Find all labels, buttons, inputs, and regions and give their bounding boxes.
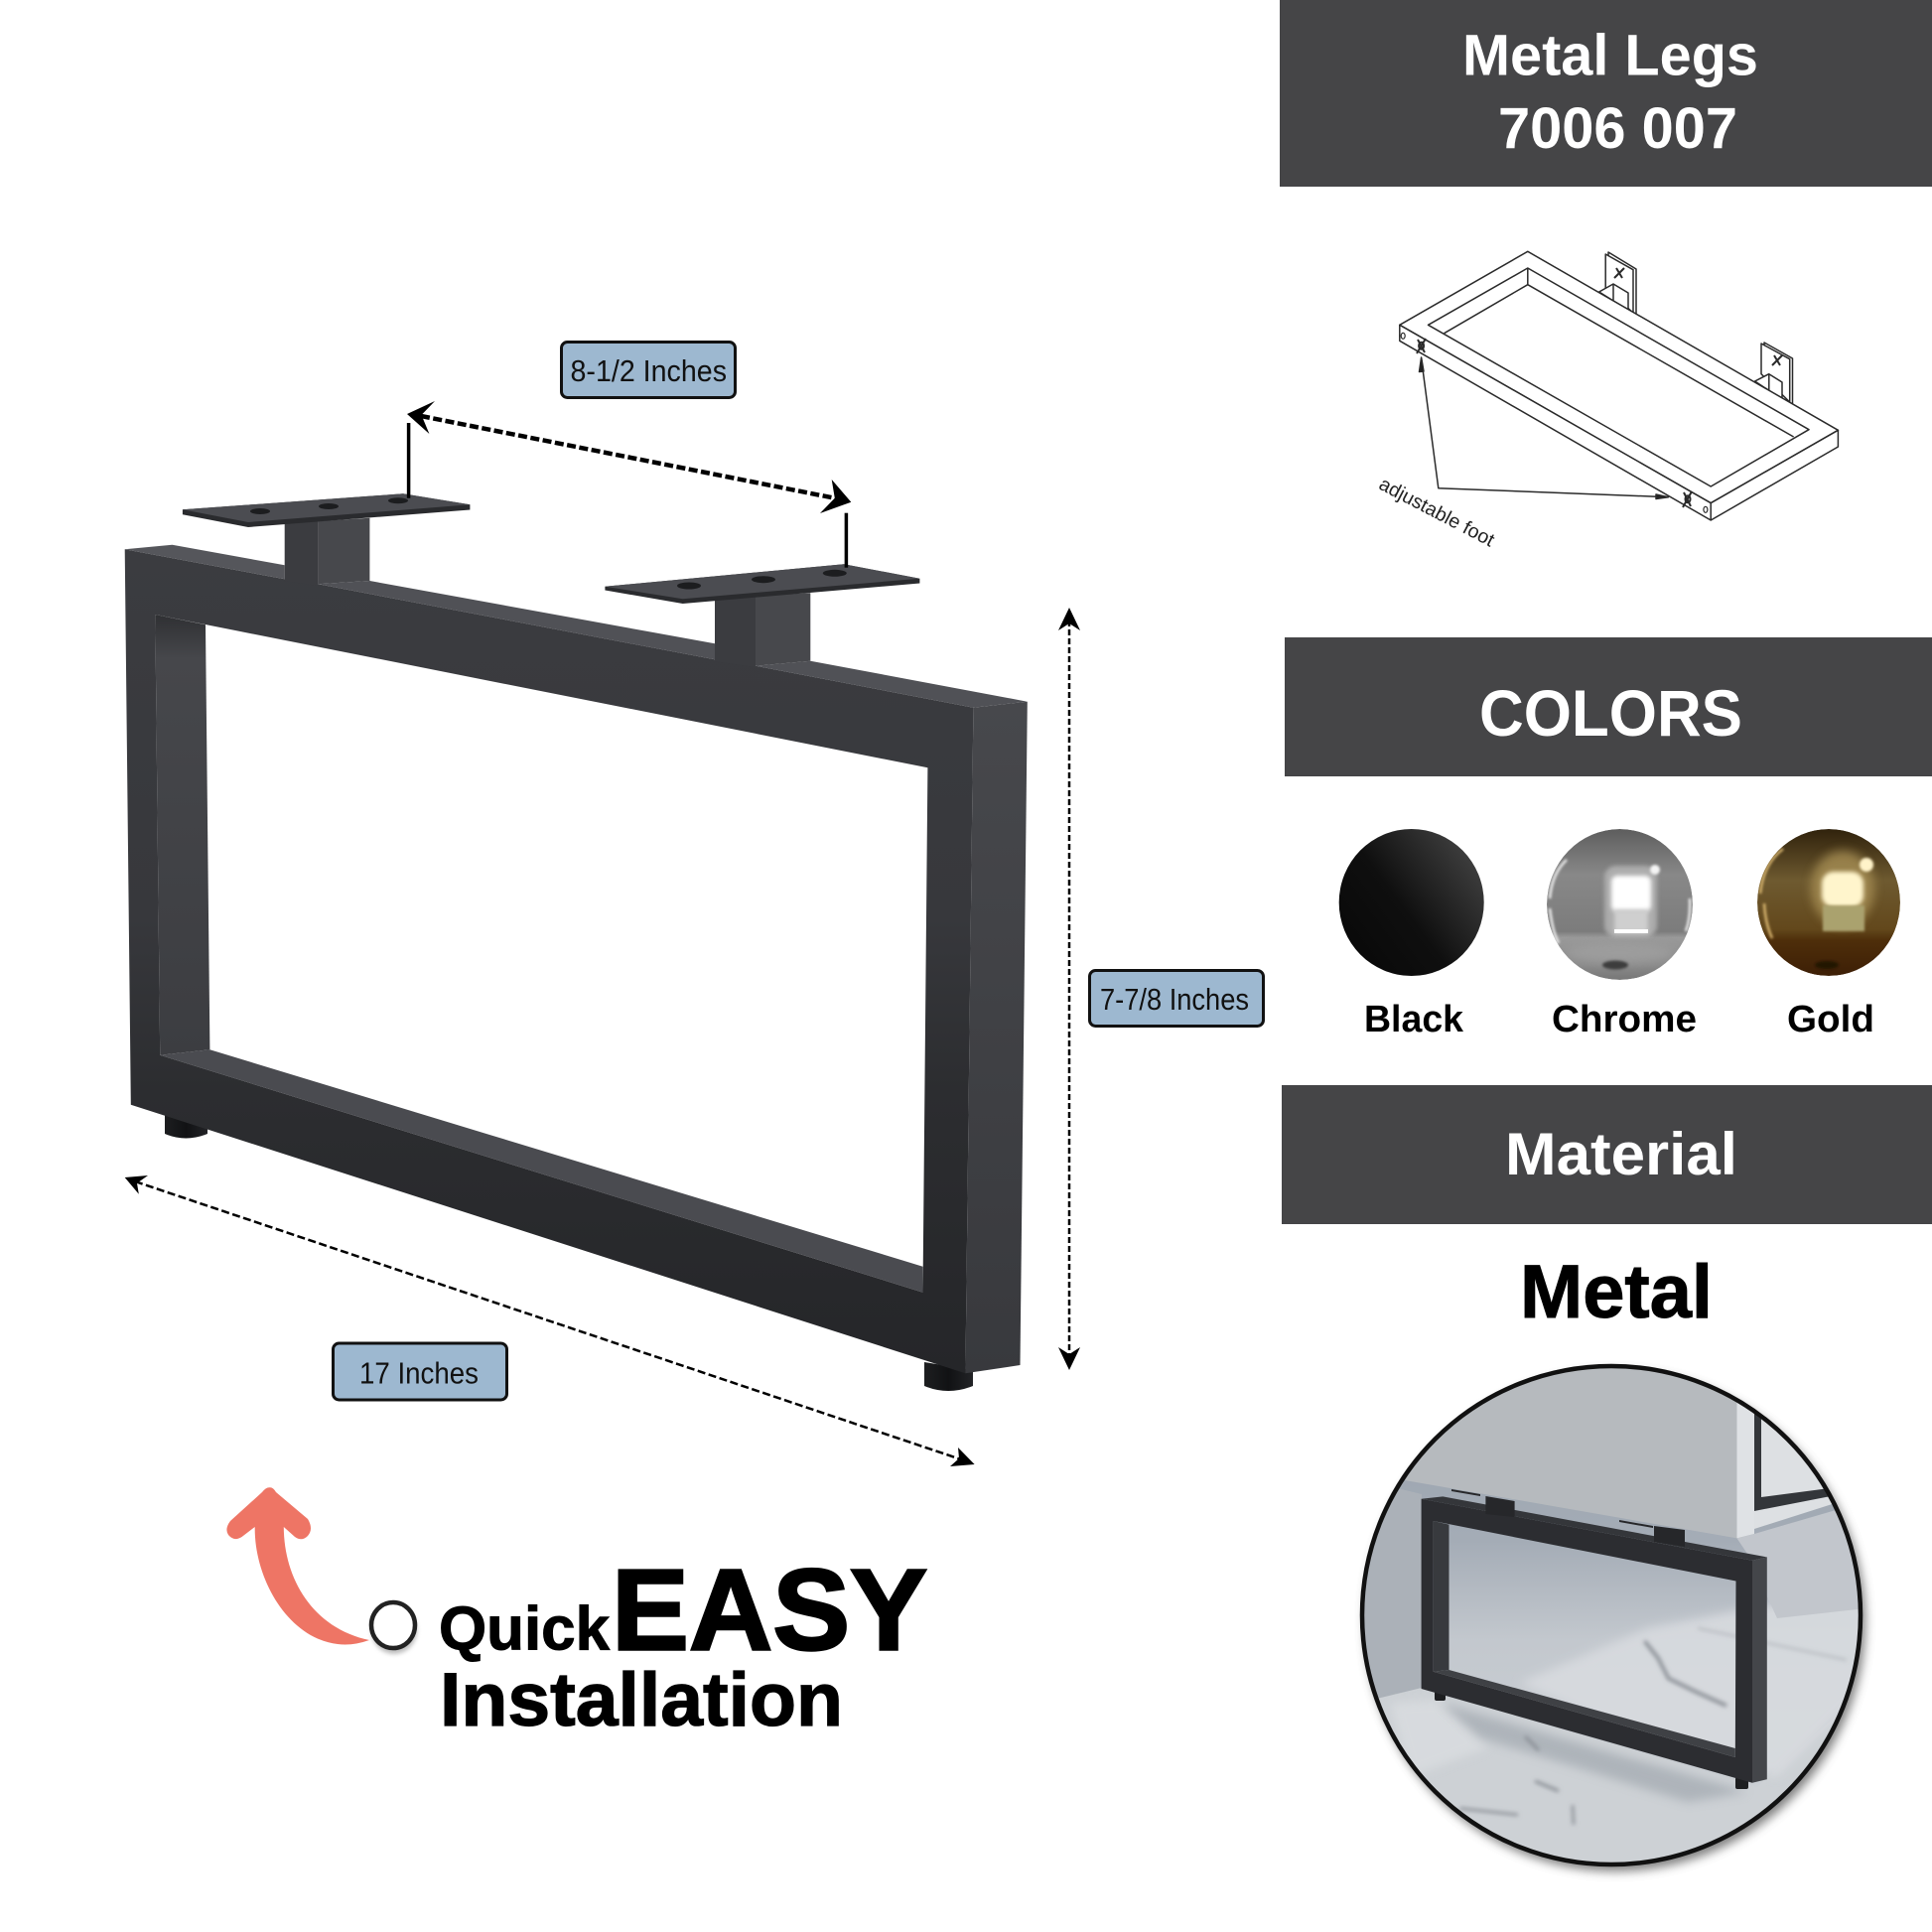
label: adjustable foot: adjustable foot: [1375, 474, 1498, 552]
photo frame left inner: [1434, 1521, 1449, 1672]
dimension arrow: width: [125, 1175, 975, 1466]
swatch label: Black: Black: [1364, 999, 1464, 1040]
dimension label: 8-1/2 Inches: [562, 342, 735, 397]
frame front face: [125, 549, 973, 1373]
text: Installation: Installation: [440, 1658, 843, 1742]
dimension arrow: plate spacing: [407, 401, 851, 568]
white side strip: [1737, 1402, 1754, 1539]
photo frame feet: [1435, 1688, 1748, 1789]
product: metal table leg frame: [125, 493, 1028, 1391]
floor beyond cabinet: [1737, 1511, 1859, 1618]
frame top: [1400, 251, 1838, 503]
photo frame bottom inner: [1434, 1670, 1735, 1757]
top bevel right: [756, 661, 1028, 708]
callout: quick easy installation: [226, 1487, 927, 1742]
text: EASY: EASY: [612, 1546, 927, 1675]
mounting stem left: [285, 518, 369, 586]
frame sides: [1400, 325, 1838, 520]
photo frame right side: [1752, 1557, 1767, 1783]
shadow under frame: [1440, 1703, 1747, 1802]
line drawing: frame with adjustable feet: [1375, 251, 1838, 552]
photo frame top bevel: [1422, 1496, 1767, 1561]
top bevel left: [125, 545, 285, 579]
floor: [1400, 1480, 1859, 1787]
left inner face: [155, 615, 209, 1055]
right foot: [924, 1362, 973, 1391]
screws and holes: [1401, 333, 1708, 512]
cabinet front: [1405, 1368, 1737, 1539]
dimension label: 7-7/8 Inches: 7-7/8 Inches: [1100, 982, 1249, 1017]
heading panel: Metal Legs 7006 007: [1280, 0, 1932, 187]
dimension arrow: height: [1058, 608, 1080, 1370]
frame opening: [1428, 268, 1809, 486]
top bevel middle: [318, 581, 715, 659]
photo frame stems and plates: [1451, 1489, 1685, 1547]
text: Metal: Metal: [1520, 1250, 1713, 1334]
swatch: black: [1339, 829, 1484, 976]
heading panel: Metal Legs 7006 007: Metal Legs: [1462, 24, 1758, 87]
text: Quick: Quick: [439, 1595, 611, 1664]
swatch: chrome: [1547, 829, 1693, 980]
marble veins: [1459, 1628, 1847, 1825]
photo frame front: [1422, 1499, 1752, 1783]
icon: ring: [371, 1602, 417, 1654]
swatch: gold: [1757, 829, 1900, 976]
floor reflection: [1378, 1688, 1422, 1702]
mounting stem right: [715, 593, 810, 667]
right side face: [965, 702, 1028, 1373]
swatch label: Gold: Gold: [1787, 999, 1874, 1040]
left foot: [165, 1114, 207, 1138]
heading panel: COLORS: COLORS: [1479, 676, 1742, 750]
heading panel: Material: Material: [1505, 1121, 1737, 1187]
swatch label: Chrome: Chrome: [1552, 999, 1697, 1040]
heading panel: Metal Legs 7006 007: 7006 007: [1498, 96, 1737, 161]
photo shadow: [1365, 1371, 1865, 1871]
bracket rear: [1599, 252, 1636, 315]
dimension label: 17 Inches: 17 Inches: [359, 1356, 479, 1390]
lower inner bevel: [160, 1049, 922, 1293]
bracket front: [1755, 343, 1793, 405]
white panel right: [1754, 1420, 1832, 1529]
mounting plate right: [605, 564, 919, 604]
dimension label: 17 Inches: [334, 1343, 506, 1400]
icon: curved arrow: [226, 1487, 369, 1644]
dimension label: 8-1/2 Inches: 8-1/2 Inches: [570, 353, 727, 388]
heading panel: COLORS: [1285, 637, 1932, 776]
pointer lines to feet: [1420, 357, 1668, 498]
dark window frame: [1754, 1414, 1829, 1511]
photo scene: [1360, 1365, 1866, 1866]
heading panel: Material: [1282, 1085, 1932, 1224]
side wall: [1364, 1489, 1422, 1698]
dimension label: 7-7/8 Inches: [1090, 971, 1263, 1027]
mounting plate left: [183, 493, 470, 527]
photo border: [1362, 1366, 1861, 1864]
marble slab: [1527, 1602, 1859, 1773]
photo: installed leg under cabinet: [1360, 1365, 1866, 1871]
